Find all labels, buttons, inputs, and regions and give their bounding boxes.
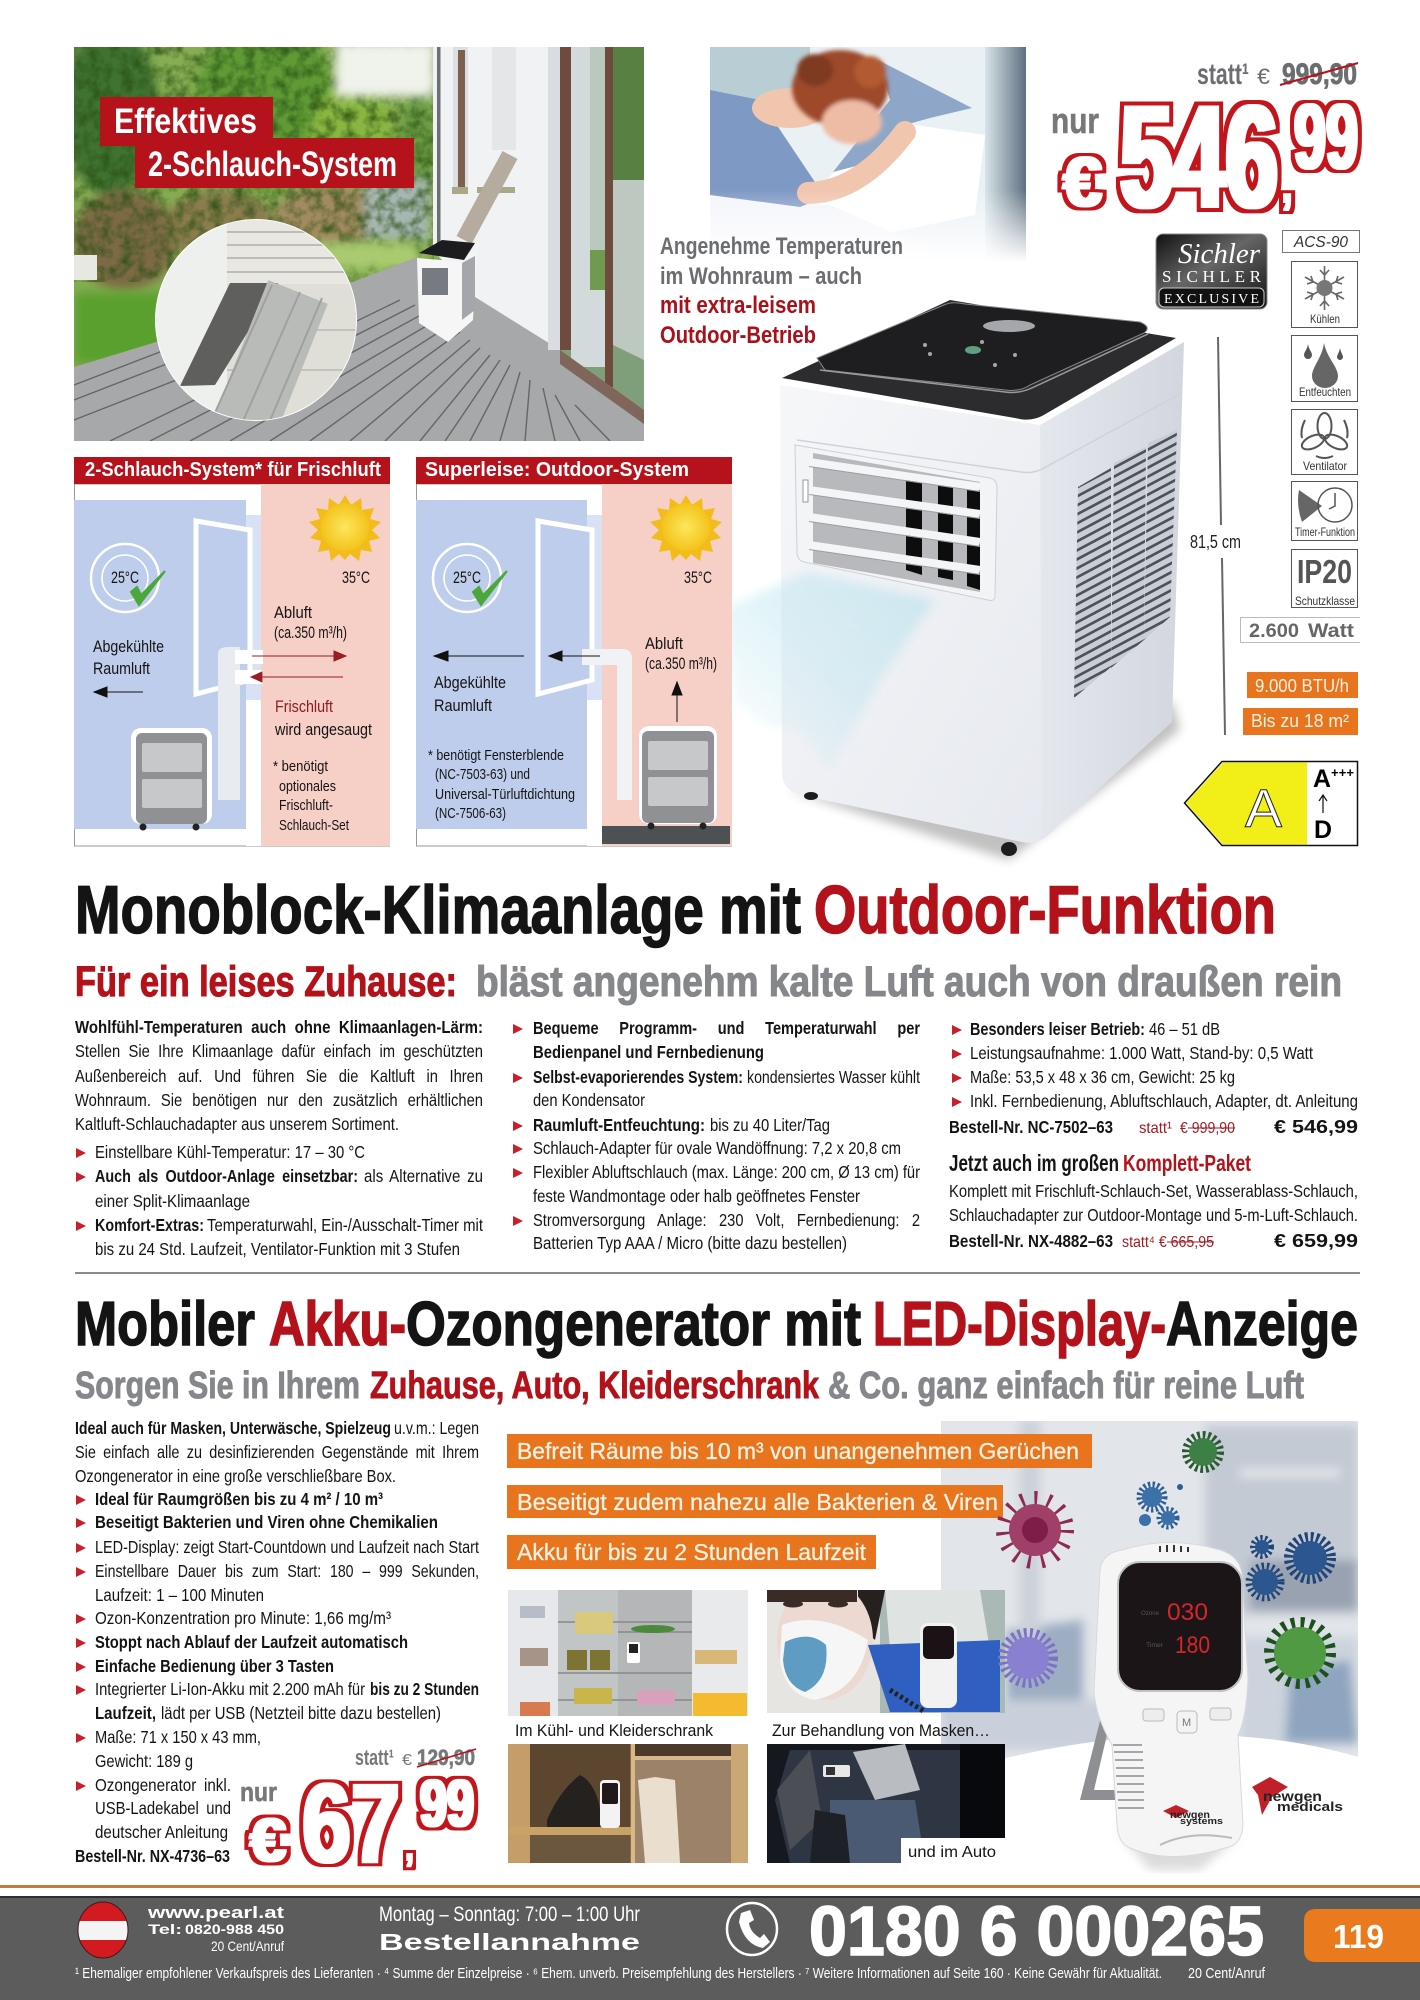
diagram header: 2-Schlauch-System* für Frischluft (85, 459, 381, 481)
logo: newgen systems (1163, 1805, 1223, 1826)
photo: device with face mask (767, 1580, 1005, 1713)
subheading: Sorgen Sie in Ihrem Zuhause: Sorgen Sie in Ihrem (75, 1365, 360, 1407)
price: old price 999,90: € (1257, 64, 1270, 89)
diagram: Superleise Outdoor-System: Abgekühlte (434, 674, 506, 692)
diagram: Superleise Outdoor-System: 35°C (684, 569, 712, 587)
label: 2.600 Watt (1240, 618, 1360, 642)
text block: column 2: Flexibler Abluftschlauch (max. Länge: 200 cm, Ø 13 cm) für (533, 1162, 920, 1182)
icon: Timer-Funktion clock: Timer-Funktion (1295, 525, 1355, 539)
text block: ozone generator features: LED-Display: zeigt Start-Countdown und Laufzeit nach Start (95, 1537, 479, 1557)
text block: ozone generator features: Maße: 71 x 150 x 43 mm, (95, 1727, 261, 1747)
diagram: 2-Schlauch-System: Schlauch-Set (279, 817, 350, 834)
heading: Mobiler Akku-Ozongenerator mit LED-Display-Anzeige (75, 1290, 1358, 1359)
energy label A: A (1245, 779, 1282, 839)
text block: ozone generator features: Integrierter Li-Ion-Akku mit 2.200 mAh für (95, 1679, 365, 1699)
arrow: exhaust (252, 651, 346, 661)
text block: column 1: Auch als Outdoor-Anlage einsetzbar: (95, 1166, 358, 1186)
text block: column 3: Komplett mit Frischluft-Schlauch-Set, Wasserablass-Schlauch, (949, 1181, 1358, 1201)
text block: column 1: Temperaturwahl, Ein-/Ausschalt-Timer mit (207, 1215, 483, 1235)
contact: website and telephone (147, 1903, 284, 1954)
text block: column 1: Komfort-Extras: (95, 1215, 204, 1235)
logo: Sichler Exclusive (1156, 234, 1267, 309)
text block: ozone generator features: u.v.m.: Legen (394, 1418, 479, 1438)
arrow: up exhaust (672, 682, 682, 722)
phone number: 0180 6 000265 (809, 1892, 1264, 1970)
caption: Zur Behandlung von Masken: Zur Behandlung von Masken… (772, 1721, 990, 1740)
price: old price 129,90: statt¹ (355, 1745, 394, 1770)
photo: device in refrigerator (508, 1590, 748, 1716)
text block: column 2: bis zu 40 Liter/Tag (710, 1115, 830, 1135)
logo: newgen systems: newgen (1170, 1810, 1210, 1821)
icon: purple virus (1005, 1635, 1051, 1681)
diagram: air conditioner unit (131, 728, 212, 830)
photo: device in car (767, 1744, 1005, 1863)
logo: Sichler Exclusive: EXCLUSIVE (1164, 292, 1259, 307)
text block: column 2: Stromversorgung Anlage: 230 Volt, Fernbedienung: 2 (533, 1210, 920, 1230)
text block: column 1: Stellen Sie Ihre Klimaanlage dafür einfach im geschützten (75, 1041, 483, 1061)
price: nur 546,99: , (1281, 156, 1293, 214)
price: nur 67,99: , (405, 1825, 414, 1869)
text block: column 1: Wohnraum. Sie benötigen nur den zusätzlich erhältlichen (75, 1090, 483, 1110)
icon: sun (650, 495, 722, 561)
text block: ozone generator features: Stoppt nach Ablauf der Laufzeit automatisch (95, 1632, 408, 1652)
text block: ozone generator features (75, 1418, 479, 1866)
dimension: height 81,5 cm: 81,5 cm (1190, 532, 1241, 552)
product: air flow (722, 572, 935, 770)
text block: column 3: statt⁴ € 665,95 (1122, 1234, 1214, 1251)
diagram: 2-Schlauch-System: optionales (279, 778, 336, 795)
price: nur 546,99: 546 (1120, 75, 1278, 238)
text block: column 3: € 659,99 (1274, 1231, 1358, 1251)
heading: Mobiler Akku-Ozongenerator mit LED-Display-Anzeige: Akku- (269, 1290, 406, 1359)
price: nur 546,99: 99 (1294, 86, 1358, 188)
diagram header (416, 457, 732, 484)
text block: column 2: feste Wandmontage oder halb geöffnetes Fenster (533, 1186, 860, 1206)
icon: IP20 Schutzklasse: Schutzklasse (1295, 594, 1355, 608)
text block: column 1: Einstellbare Kühl-Temperatur: 17 – 30 °C (95, 1142, 365, 1162)
icon: blue virus cluster top (1139, 1484, 1183, 1526)
text block: ozone generator features: Beseitigt Bakterien und Viren ohne Chemikalien (95, 1512, 438, 1532)
diagram header: Superleise: Outdoor-System (425, 459, 689, 481)
contact: website and telephone: Tel: (148, 1921, 182, 1937)
icon: Ventilator fan: Ventilator (1303, 459, 1347, 473)
callout: Effektives 2-Schlauch-System (100, 97, 414, 188)
photo inset: window hose detail (155, 218, 358, 430)
text block: column 3: Inkl. Fernbedienung, Abluftschlauch, Adapter, dt. Anleitung (970, 1091, 1358, 1111)
diagram: 2-Schlauch-System: Abluft (274, 604, 312, 622)
text block: column 3: Jetzt auch im großen (949, 1150, 1119, 1176)
text block: column 3: Komplett-Paket (1123, 1150, 1251, 1176)
price: old price 129,90: € (402, 1752, 412, 1769)
icon: green virus right (1273, 1626, 1327, 1680)
arrow: cooled air (94, 687, 143, 697)
icon: sun (309, 495, 381, 561)
diagram: 2-Schlauch-System: Abgekühlte (93, 638, 164, 656)
arrow: room air (434, 651, 524, 661)
text block: column 3: Bestell-Nr. NX-4882–63 (949, 1231, 1113, 1251)
price: old price 999,90: statt¹ (1197, 58, 1249, 91)
icon: blue virus cluster right (1251, 1539, 1329, 1596)
icon: telephone (727, 1903, 777, 1955)
text block: ozone generator features: lädt per USB (Netzteil bitte dazu bestellen) (161, 1703, 441, 1723)
diagram: 2-Schlauch-System: 35°C (342, 569, 370, 587)
product: ozone generator device (1080, 1542, 1248, 1870)
diagram: hose (582, 649, 632, 800)
text block: column 3: € 999,90 (1180, 1120, 1235, 1137)
text block: ozone generator features: Einstellbare Dauer bis zum Start: 180 – 999 Sekunden, (95, 1561, 479, 1581)
text block: column 3: statt¹ (1139, 1120, 1172, 1137)
diagram: 2-Schlauch-System (74, 457, 390, 846)
text block: hero caption: Angenehme Temperaturen (660, 233, 903, 260)
diagram: Superleise Outdoor-System: Universal-Türluftdichtung (435, 786, 575, 803)
diagram: Superleise Outdoor-System: (NC-7503-63) und (435, 766, 530, 783)
logo: Sichler Exclusive: SICHLER (1162, 267, 1262, 286)
page number (1304, 1909, 1420, 1962)
text block: column 2: Batterien Typ AAA / Micro (bitte dazu bestellen) (533, 1233, 847, 1253)
photo: device in wardrobe (508, 1744, 748, 1863)
icon: Entfeuchten drop: Entfeuchten (1299, 385, 1351, 399)
diagram: 2-Schlauch-System: * benötigt (273, 758, 329, 775)
diagram: Superleise Outdoor-System: (NC-7506-63) (435, 805, 506, 822)
price: old price 129,90: 129,90 (417, 1745, 475, 1770)
diagram: Superleise Outdoor-System (416, 457, 732, 846)
diagram: hose (218, 647, 240, 800)
text block: hero caption: Outdoor-Betrieb (660, 322, 816, 349)
divider: orange footer line (0, 1885, 1420, 1888)
diagram: 2-Schlauch-System: Raumluft (93, 660, 150, 678)
logo: newgen medicals: medicals (1277, 1799, 1343, 1814)
product: ozone generator device: 030 (1167, 1599, 1208, 1626)
icon: 25 degrees target with check: 25°C (453, 569, 481, 587)
text block: column 3: Bestell-Nr. NC-7502–63 (949, 1117, 1113, 1137)
text block: ozone generator features: Einfache Bedienung über 3 Tasten (95, 1656, 334, 1676)
price: nur 67,99: 67 (302, 1761, 400, 1886)
heading: Mobiler Akku-Ozongenerator mit LED-Display-Anzeige: LED-Display- (873, 1290, 1166, 1359)
label: 2.600 Watt: 2.600 (1249, 621, 1299, 642)
text block: column 2: Bequeme Programm- und Temperaturwahl per (533, 1018, 920, 1038)
product: wheels (804, 792, 1017, 856)
contact: website and telephone: www.pearl.at (147, 1903, 284, 1922)
icon: Kühlen snowflake (1292, 262, 1358, 328)
logo: newgen systems: systems (1180, 1816, 1223, 1826)
caption: Im Kühl- und Kleiderschrank: Im Kühl- und Kleiderschrank (515, 1721, 713, 1740)
icon: Austrian flag (77, 1902, 129, 1958)
heading: Mobiler Akku-Ozongenerator mit LED-Display-Anzeige: Ozongenerator mit (406, 1290, 861, 1359)
text block: column 3: Leistungsaufnahme: 1.000 Watt, Stand-by: 0,5 Watt (970, 1043, 1313, 1063)
energy label A: +++ (1331, 765, 1354, 780)
diagram: Superleise Outdoor-System: * benötigt Fensterblende (428, 747, 564, 764)
energy label A: D (1314, 816, 1332, 844)
subheading: Für ein leises Zuhause: Für ein leises Zuhause: (75, 958, 457, 1006)
subheading: Sorgen Sie in Ihrem Zuhause (75, 1365, 1304, 1407)
icon: green virus top (1187, 1436, 1219, 1468)
icon: Entfeuchten drop (1292, 336, 1358, 402)
contact: website and telephone: 0820-988 450 (185, 1921, 284, 1937)
callout: Akku Laufzeit: Akku für bis zu 2 Stunden Laufzeit (517, 1539, 867, 1565)
footnotes: ¹ Ehemaliger empfohlener Verkaufspreis des Lieferanten · ⁴ Summe der Einzelpreise · ⁶ Ehem. unverb. Preisempfehlung des Herstellers · ⁷ Weitere Informationen auf Seite 160 · Keine Gewähr für Aktualität. (75, 1965, 1162, 1982)
page number: 119 (1333, 1918, 1384, 1955)
callout: Effektives 2-Schlauch-System: Effektives (114, 102, 257, 141)
label: Bis zu 18 m2 (1243, 708, 1358, 735)
icon: Ventilator fan (1292, 410, 1358, 474)
text block: ozone generator features: Ideal für Raumgrößen bis zu 4 m² / 10 m³ (95, 1489, 383, 1509)
label: Bis zu 18 m2: Bis zu 18 m² (1251, 711, 1349, 731)
text block: column 2: Raumluft-Entfeuchtung: (533, 1115, 705, 1135)
text block: ozone generator features: Laufzeit, (95, 1703, 156, 1723)
label: 9.000 BTU/h: 9.000 BTU/h (1255, 676, 1349, 696)
product: ozone generator device: Ozone (1141, 1611, 1160, 1617)
contact: opening hours: Montag – Sonntag: 7:00 – 1:00 Uhr (379, 1903, 640, 1926)
text block: hero caption: im Wohnraum – auch (660, 263, 862, 290)
text block: column 1: bis zu 24 Std. Laufzeit, Ventilator-Funktion mit 3 Stufen (95, 1239, 460, 1259)
contact: website and telephone: 20 Cent/Anruf (211, 1938, 284, 1954)
text block: column 1 (75, 1017, 483, 1259)
text block: column 1: als Alternative zu (364, 1166, 483, 1186)
footer band (0, 1892, 1420, 2000)
icon: IP20 Schutzklasse (1292, 550, 1358, 608)
price: nur 67,99: nur (240, 1777, 277, 1807)
text block: column 1: einer Split-Klimaanlage (95, 1191, 250, 1211)
price: nur 546,99: nur (1051, 100, 1099, 141)
callout: Beseitigt Bakterien: Beseitigt zudem nahezu alle Bakterien & Viren (517, 1489, 998, 1515)
text block: column 3: Besonders leiser Betrieb: (970, 1019, 1145, 1039)
arrow: window air (549, 651, 600, 661)
arrow: fresh air (251, 672, 343, 682)
text block: column 1: Außenbereich auf. Und führen Sie die Kaltluft in Ihren (75, 1066, 483, 1086)
product: air vent (795, 445, 997, 600)
model label: ACS-90 (1282, 230, 1360, 252)
footnotes: 20 Cent/Anruf (1188, 1965, 1266, 1982)
icon: 25 degrees target with check (91, 544, 165, 612)
product: ozone generator device: 180 (1175, 1632, 1210, 1659)
product: portable air conditioner (722, 300, 1184, 860)
photo: woman sleeping (710, 47, 1026, 262)
photo: living room background (941, 1420, 1358, 1780)
diagram: 2-Schlauch-System: wird angesaugt (274, 721, 372, 739)
energy label A (1184, 762, 1358, 846)
icon: Kühlen snowflake: Kühlen (1310, 312, 1340, 326)
photo: outdoor terrace with air conditioner (62, 20, 644, 441)
text block: ozone generator features: bis zu 2 Stunden (370, 1679, 479, 1699)
subheading: Für ein leises Zuhause (75, 958, 1342, 1006)
logo: newgen medicals (1252, 1777, 1343, 1815)
text block: ozone generator features: Ideal auch für Masken, Unterwäsche, Spielzeug (75, 1418, 391, 1438)
text block: column 2: Bedienpanel und Fernbedienung (533, 1042, 764, 1062)
price: old price 129,90 (355, 1745, 476, 1770)
text block: ozone generator features: USB-Ladekabel und (95, 1798, 231, 1818)
text block: ozone generator features: Ozon-Konzentration pro Minute: 1,66 mg/m³ (95, 1608, 391, 1628)
callout: Befreit Räume: Befreit Räume bis 10 m³ von unangenehmen Gerüchen (517, 1438, 1079, 1464)
model label: ACS-90: ACS-90 (1293, 234, 1348, 251)
icon: 25 degrees target with check (433, 544, 507, 612)
text block: column 2: kondensiertes Wasser kühlt (747, 1067, 920, 1087)
icon: IP20 Schutzklasse: IP20 (1297, 553, 1352, 590)
callout: Effektives 2-Schlauch-System: 2-Schlauch-System (148, 145, 397, 184)
price: nur 67,99: € (250, 1807, 286, 1874)
diagram: 2-Schlauch-System: (ca.350 m³/h) (274, 624, 347, 642)
price: nur 67,99 (240, 1761, 474, 1886)
text block: ozone generator features: Ozongenerator in eine große verschließbare Box. (75, 1466, 396, 1486)
label: und im Auto: und im Auto (908, 1844, 996, 1861)
price: old price 999,90: 999,90 (1282, 58, 1357, 91)
subheading: Sorgen Sie in Ihrem Zuhause: & Co. ganz einfach für reine Luft (828, 1365, 1304, 1407)
price: nur 546,99: € (1063, 143, 1102, 221)
icon: pink virus (1008, 1503, 1062, 1557)
product: side grille (1074, 430, 1177, 698)
logo: Sichler Exclusive: Sichler (1178, 239, 1260, 270)
text block: hero caption (660, 233, 903, 349)
text block: column 1: Kaltluft-Schlauchadapter aus unserem Sortiment. (75, 1114, 399, 1134)
text block: ozone generator features: Gewicht: 189 g (95, 1751, 193, 1771)
text block: ozone generator features: Laufzeit: 1 – 100 Minuten (95, 1585, 264, 1605)
product: ozone generator device: M (1182, 1717, 1191, 1729)
text block: column 2: den Kondensator (533, 1090, 645, 1110)
logo: newgen medicals: newgen (1263, 1788, 1322, 1804)
text block: column 3: 46 – 51 dB (1149, 1019, 1220, 1039)
diagram: Superleise Outdoor-System: Raumluft (434, 697, 492, 715)
label: und im Auto (901, 1838, 1005, 1863)
text block: column 3: Maße: 53,5 x 48 x 36 cm, Gewicht: 25 kg (970, 1067, 1235, 1087)
text block: column 2: Schlauch-Adapter für ovale Wandöffnung: 7,2 x 20,8 cm (533, 1138, 901, 1158)
text block: hero caption: mit extra-leisem (660, 292, 816, 319)
diagram: 2-Schlauch-System: Frischluft (275, 698, 333, 716)
energy label A: A (1313, 765, 1331, 793)
price: nur 67,99: 99 (420, 1766, 474, 1840)
heading: Monoblock-Klimaanlage mit Outdoor-Funktion: Monoblock-Klimaanlage mit (75, 872, 801, 948)
price: old price 999,90 (1197, 58, 1358, 91)
heading: Monoblock-Klimaanlage mit Outdoor-Funktion: Outdoor-Funktion (814, 872, 1276, 948)
subheading: Sorgen Sie in Ihrem Zuhause: Zuhause, Auto, Kleiderschrank (370, 1365, 820, 1407)
dimension: height 81,5 cm (1190, 337, 1241, 735)
icon: Timer-Funktion clock (1292, 482, 1358, 540)
text block: column 3: € 546,99 (1274, 1117, 1358, 1137)
text block: ozone generator features: Bestell-Nr. NX-4736–63 (75, 1846, 230, 1866)
diagram: air conditioner unit (639, 726, 717, 830)
heading: Mobiler Akku-Ozongenerator mit LED-Display-Anzeige: Anzeige (1166, 1290, 1358, 1359)
text block: column 1: Wohlfühl-Temperaturen auch ohne Klimaanlagen-Lärm: (75, 1017, 483, 1037)
contact: opening hours (379, 1903, 640, 1955)
text block: ozone generator features: deutscher Anleitung (95, 1822, 228, 1842)
text block: column 2: Selbst-evaporierendes System: (533, 1067, 743, 1087)
product: ozone generator device: Timer (1146, 1643, 1163, 1649)
icon: 25 degrees target with check: 25°C (111, 569, 139, 587)
diagram: Superleise Outdoor-System: Abluft (645, 635, 683, 653)
diagram: 2-Schlauch-System: Frischluft- (279, 797, 333, 814)
text block: column 2 (513, 1018, 920, 1253)
text block: column 3 (949, 1019, 1358, 1251)
diagram: Superleise Outdoor-System: (ca.350 m³/h) (645, 655, 717, 673)
text block: ozone generator features: Sie einfach alle zu desinfizierenden Gegenstände mit Ihrem (75, 1442, 479, 1462)
text block: ozone generator features: Ozongenerator inkl. (95, 1775, 231, 1795)
heading: Mobiler Akku-Ozongenerator mit LED-Display-Anzeige: Mobiler (75, 1290, 255, 1359)
label: 2.600 Watt: Watt (1308, 621, 1355, 642)
contact: opening hours: Bestellannahme (379, 1929, 640, 1955)
